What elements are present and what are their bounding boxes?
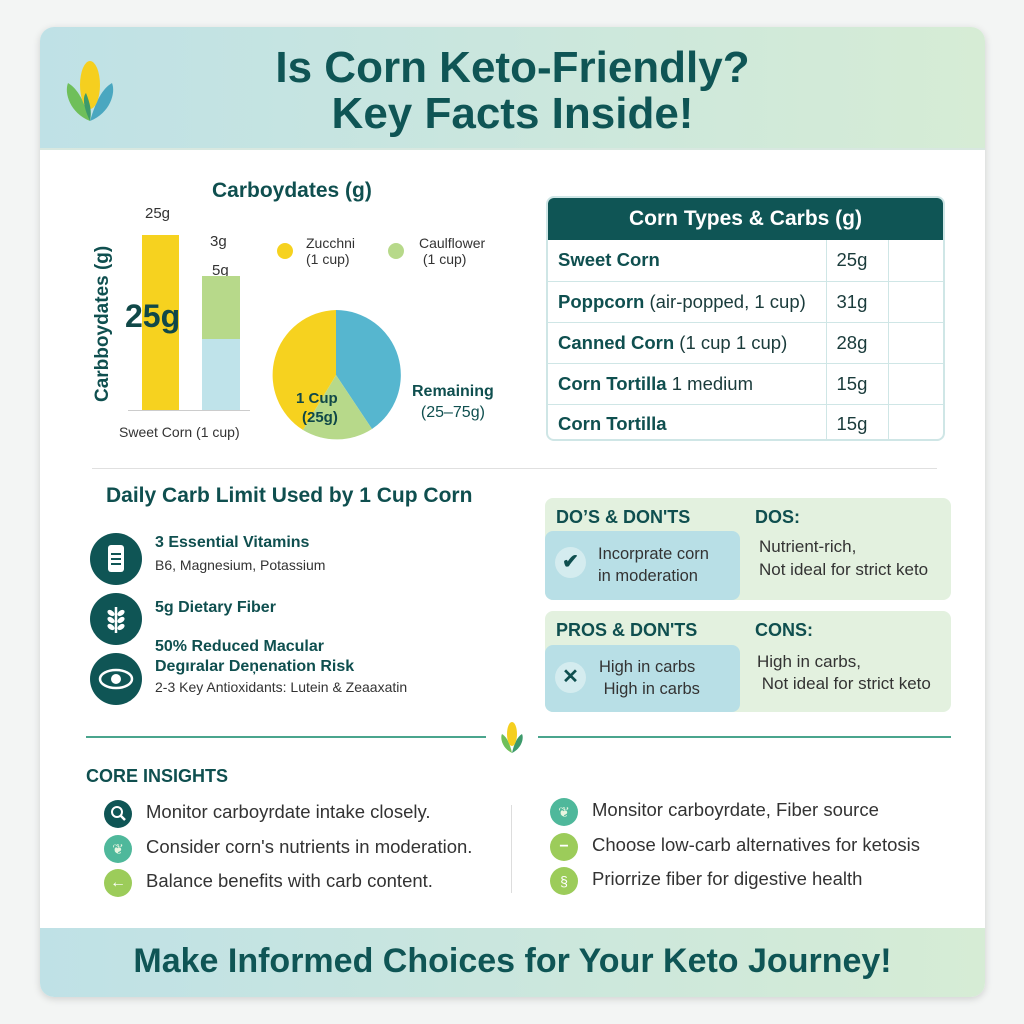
table: corn types: Sweet Corn xyxy=(558,249,660,270)
pie label: (25–75g) xyxy=(421,404,485,421)
panel: cons: High in carbs xyxy=(604,680,700,698)
table: corn types: 28g xyxy=(836,332,867,352)
legend xyxy=(277,235,485,267)
panel: dos: ✔ xyxy=(562,551,579,573)
table: corn types: Corn Tortilla 1 medium xyxy=(558,372,753,394)
nutrient list: Degıralar Deņenation Risk xyxy=(155,658,354,675)
bar chart: Carbboydates (g) xyxy=(92,246,113,402)
bar chart: 25g xyxy=(145,205,170,222)
panel: dos: Incorprate corn xyxy=(598,545,709,563)
bar chart: 5g xyxy=(212,262,229,279)
nutrient list: B6, Magnesium, Potassium xyxy=(155,557,325,573)
pie chart: (25g) xyxy=(302,409,338,426)
insights left: Balance benefits with carb content. xyxy=(146,870,433,891)
nutrient list: 5g Dietary Fiber xyxy=(155,599,276,616)
footer band: Make Informed Choices for Your Keto Journey! xyxy=(133,942,892,980)
legend: Caulflower xyxy=(419,235,485,251)
panel: cons: CONS: xyxy=(755,620,813,640)
bar chart: 3g xyxy=(210,233,227,250)
footer band xyxy=(40,928,985,997)
heading: daily carb: Daily Carb Limit Used by 1 Cup Corn xyxy=(106,484,472,507)
legend: (1 cup) xyxy=(423,251,466,267)
table: corn types: 25g xyxy=(836,249,867,270)
table: corn types: Corn Tortilla xyxy=(558,413,667,434)
title xyxy=(275,43,750,138)
insights right: § xyxy=(560,873,568,889)
pie label xyxy=(412,383,494,421)
table: corn types: 15g xyxy=(836,372,867,394)
panel: dos: in moderation xyxy=(598,567,698,585)
insights right: Priorrize fiber for digestive health xyxy=(592,868,862,889)
panel: cons: High in carbs, xyxy=(757,652,861,671)
insights left: ← xyxy=(110,874,126,891)
table: corn types: Poppcorn (air-popped, 1 cup) xyxy=(558,290,806,312)
nutrient list: 50% Reduced Macular xyxy=(155,638,324,655)
header band xyxy=(40,27,985,150)
insights right: Choose low-carb alternatives for ketosis xyxy=(592,834,920,855)
bar chart xyxy=(92,205,250,440)
nutrient list: 3 Essential Vitamins xyxy=(155,534,309,551)
panel: cons: Not ideal for strict keto xyxy=(762,674,931,693)
pie label: Remaining xyxy=(412,383,494,400)
panel: dos: Nutrient-rich, xyxy=(759,537,856,556)
pie chart: 1 Cup xyxy=(296,390,338,407)
icon: eye xyxy=(90,653,142,705)
chart title: Carboydates (g) xyxy=(212,179,372,202)
panel: cons xyxy=(545,611,951,712)
table: corn types: 15g xyxy=(836,413,867,434)
insights left xyxy=(104,800,472,897)
panel: cons: PROS & DON'TS xyxy=(556,620,697,640)
nutrient list: 2-3 Key Antioxidants: Lutein & Zeaaxatin xyxy=(155,679,407,695)
insights right: ❦ xyxy=(558,804,570,820)
insights left: Consider corn's nutrients in moderation. xyxy=(146,836,472,857)
legend: Zucchni xyxy=(306,235,355,251)
icon: wheat xyxy=(90,593,142,645)
insights left: ❦ xyxy=(112,841,124,857)
icon: bottle xyxy=(90,533,142,585)
title: Key Facts Inside! xyxy=(332,89,693,138)
legend: (1 cup) xyxy=(306,251,350,267)
table: corn types: Canned Corn (1 cup 1 cup) xyxy=(558,332,787,352)
panel: cons: ✕ xyxy=(562,666,579,688)
pie chart xyxy=(272,310,401,440)
panel: dos: DOS: xyxy=(755,507,800,527)
icon: corn xyxy=(66,61,114,121)
panel: dos: Not ideal for strict keto xyxy=(759,560,928,579)
nutrient list xyxy=(90,533,407,705)
table: corn types: Corn Types & Carbs (g) xyxy=(629,207,862,230)
divider with corn icon xyxy=(86,722,951,753)
insights left: Monitor carboyrdate intake closely. xyxy=(146,801,430,822)
table: corn types: 31g xyxy=(836,290,867,312)
insights right xyxy=(550,798,920,895)
insights right: − xyxy=(559,838,569,855)
table: corn types xyxy=(546,196,945,441)
bar chart: 25g xyxy=(125,298,180,334)
panel: dos: DO’S & DON'TS xyxy=(556,507,690,527)
bar chart: Sweet Corn (1 cup) xyxy=(119,424,240,440)
heading: core insights: CORE INSIGHTS xyxy=(86,766,228,786)
title: Is Corn Keto-Friendly? xyxy=(275,43,750,92)
insights right: Monsitor carboyrdate, Fiber source xyxy=(592,799,879,820)
panel: dos xyxy=(545,498,951,600)
panel: cons: High in carbs xyxy=(599,658,695,676)
